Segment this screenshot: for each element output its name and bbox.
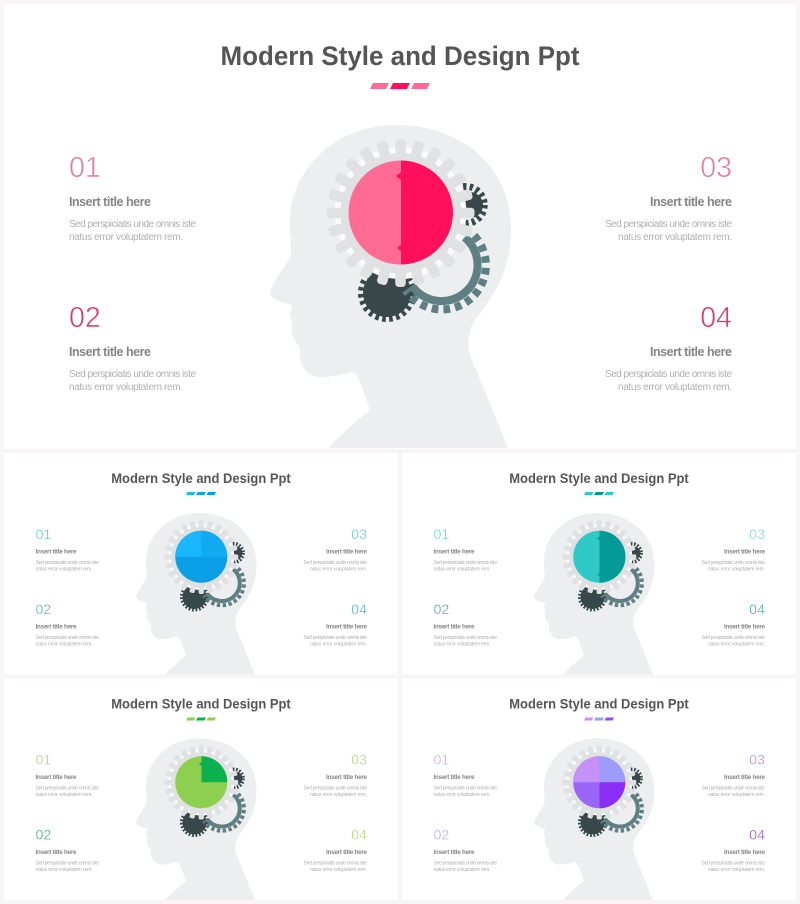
item 02: natus error voluptatem rem. bbox=[36, 867, 92, 873]
brain circle bbox=[175, 756, 227, 808]
item 02: natus error voluptatem rem. bbox=[69, 382, 183, 393]
panel: green slide bbox=[4, 678, 398, 900]
item 04: Insert title here bbox=[650, 345, 732, 359]
item 04: Insert title here bbox=[326, 849, 368, 856]
brain circle bbox=[573, 756, 625, 808]
item 02 bbox=[36, 602, 99, 648]
item 01: natus error voluptatem rem. bbox=[434, 566, 490, 572]
item 02: natus error voluptatem rem. bbox=[434, 867, 490, 873]
item 04: Sed perspiciatis unde omnis iste bbox=[304, 860, 367, 866]
item 02: 02 bbox=[434, 602, 449, 618]
item 03: Insert title here bbox=[326, 548, 368, 556]
item 03: 03 bbox=[749, 527, 765, 543]
item 04 bbox=[304, 828, 368, 873]
item 03 bbox=[304, 752, 368, 798]
accent dashes bbox=[370, 83, 430, 89]
item 01: Sed perspiciatis unde omnis iste bbox=[434, 560, 497, 566]
item 03: Sed perspiciatis unde omnis iste bbox=[304, 786, 367, 792]
item 01: 01 bbox=[434, 527, 449, 543]
item 01 bbox=[434, 752, 497, 798]
item 01: 01 bbox=[36, 752, 51, 768]
accent dashes bbox=[584, 718, 614, 720]
item 01: 01 bbox=[434, 752, 449, 768]
item 02 bbox=[434, 602, 497, 648]
item 02: 02 bbox=[434, 828, 449, 844]
title: Modern Style and Design Ppt bbox=[509, 471, 689, 486]
head with gears bbox=[136, 513, 256, 674]
item 04: 04 bbox=[749, 602, 765, 618]
title: Modern Style and Design Ppt bbox=[220, 41, 580, 71]
item 04 bbox=[304, 602, 368, 648]
item 01: Sed perspiciatis unde omnis iste bbox=[36, 560, 99, 566]
item 02: Insert title here bbox=[434, 849, 475, 856]
item 01: 01 bbox=[69, 152, 101, 184]
panel: purple slide bbox=[402, 678, 796, 900]
item 04: Sed perspiciatis unde omnis iste bbox=[605, 369, 732, 380]
item 03 bbox=[702, 527, 766, 572]
item 02 bbox=[69, 302, 196, 393]
item 03 bbox=[304, 527, 368, 572]
brain circle bbox=[348, 160, 453, 264]
item 02: natus error voluptatem rem. bbox=[36, 642, 92, 648]
item 04 bbox=[605, 302, 732, 393]
item 02: Sed perspiciatis unde omnis iste bbox=[36, 860, 99, 866]
item 03: Insert title here bbox=[650, 195, 732, 209]
item 01 bbox=[434, 527, 497, 572]
item 04: natus error voluptatem rem. bbox=[708, 867, 765, 873]
item 03: Insert title here bbox=[724, 774, 766, 781]
item 02: Sed perspiciatis unde omnis iste bbox=[434, 635, 497, 641]
item 01: 01 bbox=[36, 527, 51, 543]
item 02: Insert title here bbox=[36, 849, 77, 856]
item 04: Insert title here bbox=[724, 624, 766, 630]
item 04: natus error voluptatem rem. bbox=[310, 642, 367, 648]
item 01: natus error voluptatem rem. bbox=[69, 232, 183, 243]
item 04: Sed perspiciatis unde omnis iste bbox=[702, 860, 765, 866]
item 01: Sed perspiciatis unde omnis iste bbox=[36, 786, 99, 792]
item 01: natus error voluptatem rem. bbox=[434, 792, 490, 798]
head with gears bbox=[534, 513, 654, 674]
item 03 bbox=[605, 152, 732, 243]
item 04: natus error voluptatem rem. bbox=[708, 642, 765, 648]
title: Modern Style and Design Ppt bbox=[509, 696, 689, 712]
item 02: Sed perspiciatis unde omnis iste bbox=[36, 635, 99, 641]
item 02 bbox=[36, 828, 99, 873]
item 03: Sed perspiciatis unde omnis iste bbox=[605, 219, 732, 230]
item 01 bbox=[36, 752, 99, 798]
item 04: Insert title here bbox=[724, 849, 766, 856]
item 04: Sed perspiciatis unde omnis iste bbox=[304, 635, 367, 641]
item 01: Insert title here bbox=[434, 548, 475, 556]
head with gears bbox=[136, 738, 256, 900]
brain circle bbox=[573, 531, 626, 583]
item 03: natus error voluptatem rem. bbox=[310, 792, 367, 798]
item 01: Insert title here bbox=[434, 774, 475, 781]
item 01: Sed perspiciatis unde omnis iste bbox=[69, 219, 196, 230]
item 02: Sed perspiciatis unde omnis iste bbox=[69, 369, 196, 380]
panel: pink main slide bbox=[4, 4, 796, 449]
item 02: 02 bbox=[36, 828, 51, 844]
item 01: Sed perspiciatis unde omnis iste bbox=[434, 786, 497, 792]
panel: blue slide bbox=[4, 453, 398, 674]
item 03: natus error voluptatem rem. bbox=[708, 566, 765, 572]
panel: teal slide bbox=[402, 453, 796, 674]
item 04: 04 bbox=[351, 828, 367, 844]
item 01: Insert title here bbox=[69, 195, 151, 209]
item 04: 04 bbox=[351, 602, 367, 618]
item 02 bbox=[434, 828, 497, 873]
item 01: natus error voluptatem rem. bbox=[36, 792, 92, 798]
item 02: Insert title here bbox=[36, 624, 77, 630]
item 03: 03 bbox=[351, 527, 367, 543]
accent dashes bbox=[584, 492, 614, 495]
title: Modern Style and Design Ppt bbox=[111, 696, 291, 712]
item 01 bbox=[69, 152, 196, 243]
item 03: Sed perspiciatis unde omnis iste bbox=[702, 560, 765, 566]
item 02: Insert title here bbox=[69, 345, 151, 359]
item 03: Insert title here bbox=[724, 548, 766, 556]
item 03 bbox=[702, 752, 766, 798]
brain circle bbox=[175, 531, 227, 583]
item 04: 04 bbox=[749, 828, 765, 844]
item 02: 02 bbox=[36, 602, 51, 618]
item 03: 03 bbox=[700, 152, 732, 184]
item 04 bbox=[702, 602, 766, 648]
accent dashes bbox=[186, 492, 216, 495]
item 03: Sed perspiciatis unde omnis iste bbox=[702, 786, 765, 792]
item 02: 02 bbox=[69, 302, 101, 334]
item 01: natus error voluptatem rem. bbox=[36, 566, 92, 572]
item 03: natus error voluptatem rem. bbox=[310, 566, 367, 572]
item 02: Insert title here bbox=[434, 624, 475, 630]
item 03: natus error voluptatem rem. bbox=[708, 792, 765, 798]
accent dashes bbox=[186, 718, 216, 720]
item 03: Sed perspiciatis unde omnis iste bbox=[304, 560, 367, 566]
item 01: Insert title here bbox=[36, 548, 77, 556]
item 04: Insert title here bbox=[326, 624, 368, 630]
item 01: Insert title here bbox=[36, 774, 77, 781]
item 03: 03 bbox=[749, 752, 765, 768]
title: Modern Style and Design Ppt bbox=[111, 471, 291, 486]
head with gears bbox=[270, 125, 511, 448]
item 03: natus error voluptatem rem. bbox=[618, 232, 732, 243]
item 04: natus error voluptatem rem. bbox=[310, 867, 367, 873]
item 03: 03 bbox=[351, 752, 367, 768]
item 02: natus error voluptatem rem. bbox=[434, 642, 490, 648]
item 03: Insert title here bbox=[326, 774, 368, 781]
item 02: Sed perspiciatis unde omnis iste bbox=[434, 860, 497, 866]
item 04: Sed perspiciatis unde omnis iste bbox=[702, 635, 765, 641]
item 04: natus error voluptatem rem. bbox=[618, 382, 732, 393]
item 04: 04 bbox=[700, 302, 732, 334]
head with gears bbox=[534, 738, 654, 900]
item 04 bbox=[702, 828, 766, 873]
item 01 bbox=[36, 527, 99, 572]
